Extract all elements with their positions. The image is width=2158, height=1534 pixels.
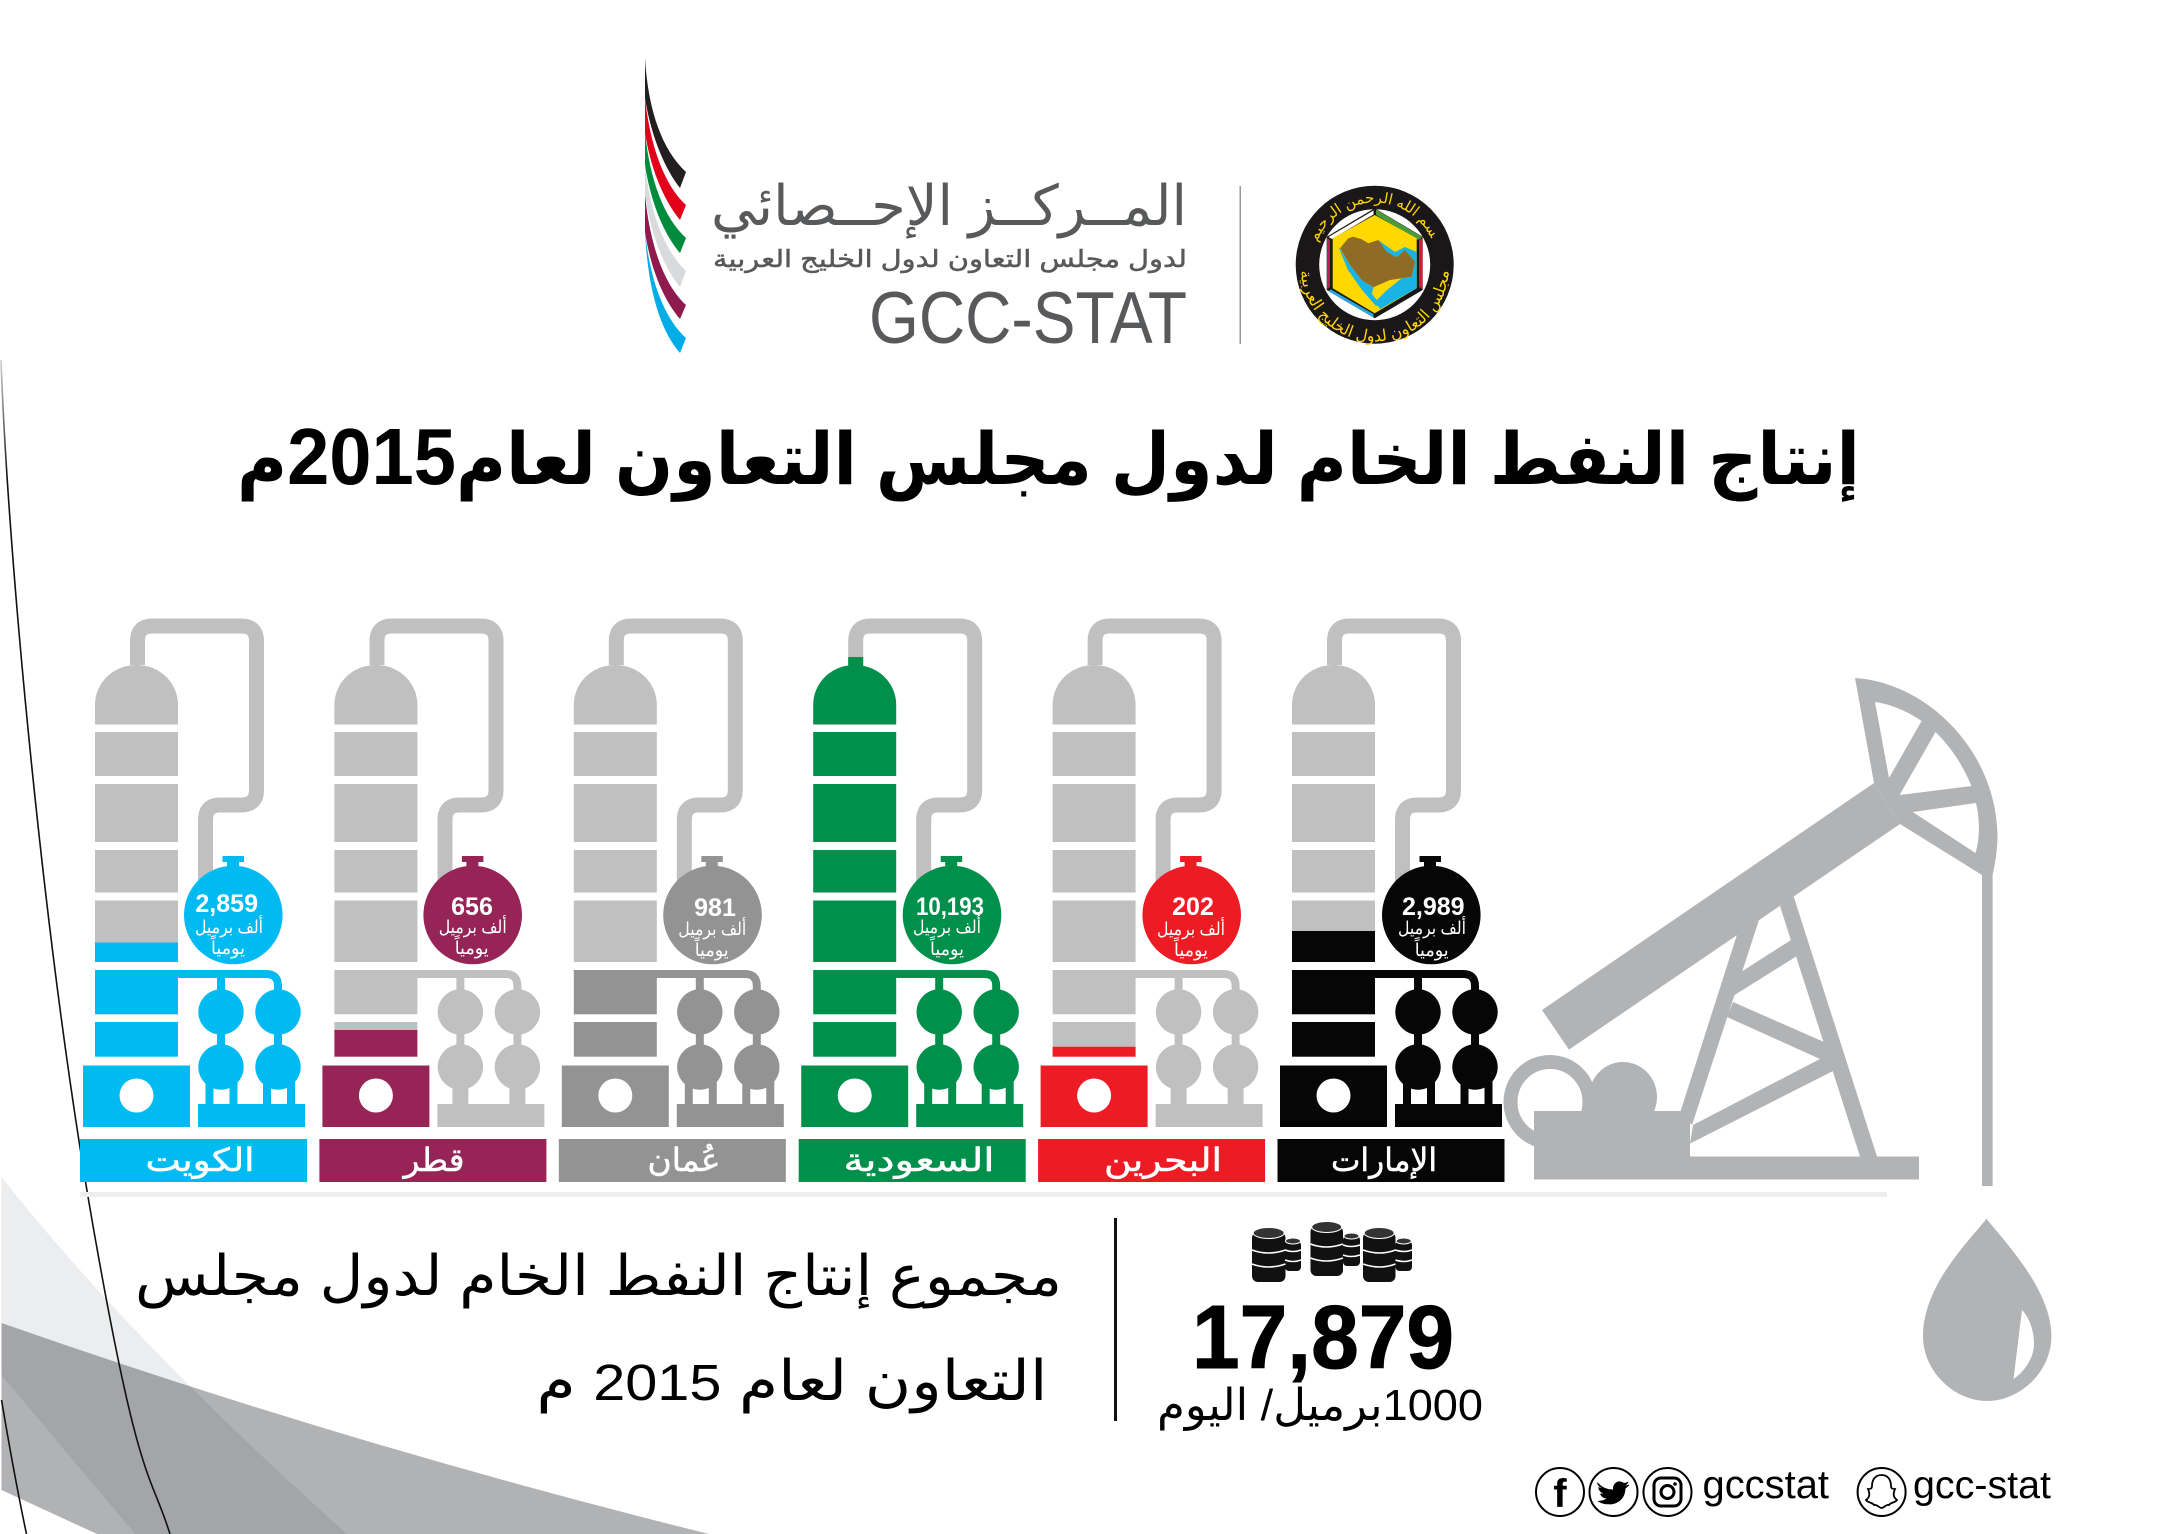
column: Saudi Arabia: ألف برميل xyxy=(913,915,981,938)
column: Kuwait: يومياً xyxy=(210,935,245,959)
column: UAE: الإمارات xyxy=(1331,1142,1437,1179)
divider line xyxy=(80,1192,1887,1197)
column: Bahrain: ألف برميل xyxy=(1157,917,1225,940)
social: facebook icon: f xyxy=(1553,1472,1567,1516)
column: UAE: 2,989 xyxy=(1402,893,1465,921)
column: Qatar: يومياً xyxy=(454,935,489,959)
icon: pump jack xyxy=(1510,678,1998,1186)
column: Saudi Arabia: 10,193 xyxy=(916,893,984,921)
logo: GCC-STAT wordmark: GCC-STAT xyxy=(869,278,1187,359)
column: UAE xyxy=(1278,626,1504,1182)
total description text, line 2: التعاون لعام 2015 م xyxy=(536,1349,1048,1414)
background: grey swoosh shapes xyxy=(1,360,709,1534)
column: Qatar: قطر xyxy=(401,1142,464,1179)
icon: oil barrels xyxy=(1252,1222,1412,1282)
column: Bahrain: يومياً xyxy=(1173,937,1208,961)
column: Oman: 981 xyxy=(694,894,736,922)
total value: 17,879 xyxy=(1192,1288,1454,1388)
social: instagram icon xyxy=(1644,1468,1692,1516)
vertical separator xyxy=(1114,1218,1117,1421)
column: Qatar xyxy=(319,626,546,1182)
column: Oman xyxy=(559,626,786,1182)
column: Kuwait: الكويت xyxy=(146,1142,254,1179)
column: Saudi Arabia xyxy=(799,626,1026,1182)
column: Qatar: 656 xyxy=(451,893,493,921)
logo divider xyxy=(1240,186,1241,344)
column: Bahrain: 202 xyxy=(1172,893,1214,921)
column: Bahrain: البحرين xyxy=(1104,1142,1222,1179)
social: handle gcc-stat: gcc-stat xyxy=(1913,1464,2051,1507)
column: Saudi Arabia: السعودية xyxy=(844,1142,994,1179)
social: twitter icon xyxy=(1590,1468,1638,1516)
column: UAE: ألف برميل xyxy=(1398,916,1466,939)
column: Saudi Arabia: يومياً xyxy=(929,936,964,960)
column: Kuwait: 2,859 xyxy=(195,890,258,918)
social: handle gccstat: gccstat xyxy=(1702,1463,1829,1507)
icon: oil drop xyxy=(1923,1219,2051,1401)
title: إنتاج النفط الخام لدول مجلس التعاون لعام2015م xyxy=(237,412,1860,502)
column: Kuwait xyxy=(80,626,307,1182)
column: Bahrain xyxy=(1038,626,1265,1182)
GCC emblem: مجلس التعاون لدول الخليج العربية xyxy=(1300,272,1449,345)
social: facebook icon xyxy=(1536,1468,1584,1516)
GCC emblem xyxy=(1296,186,1454,345)
logo: Arabic subtitle: لدول مجلس التعاون لدول الخليج العربية xyxy=(713,246,1187,273)
logo: Arabic name: المــركــز الإحــصائي xyxy=(711,174,1187,239)
total unit: 1000برميل/ اليوم xyxy=(1157,1381,1483,1431)
logo: coloured ribbons xyxy=(645,58,686,353)
column: Kuwait: ألف برميل xyxy=(195,915,263,938)
social: snapchat icon xyxy=(1858,1468,1906,1516)
column: Qatar: ألف برميل xyxy=(439,915,507,938)
column: Oman: عُمان xyxy=(648,1142,720,1178)
total description text, line 1: مجموع إنتاج النفط الخام لدول مجلس xyxy=(135,1244,1062,1310)
column: Oman: يومياً xyxy=(694,937,729,961)
column: UAE: يومياً xyxy=(1414,937,1449,961)
column: Oman: ألف برميل xyxy=(678,917,746,940)
